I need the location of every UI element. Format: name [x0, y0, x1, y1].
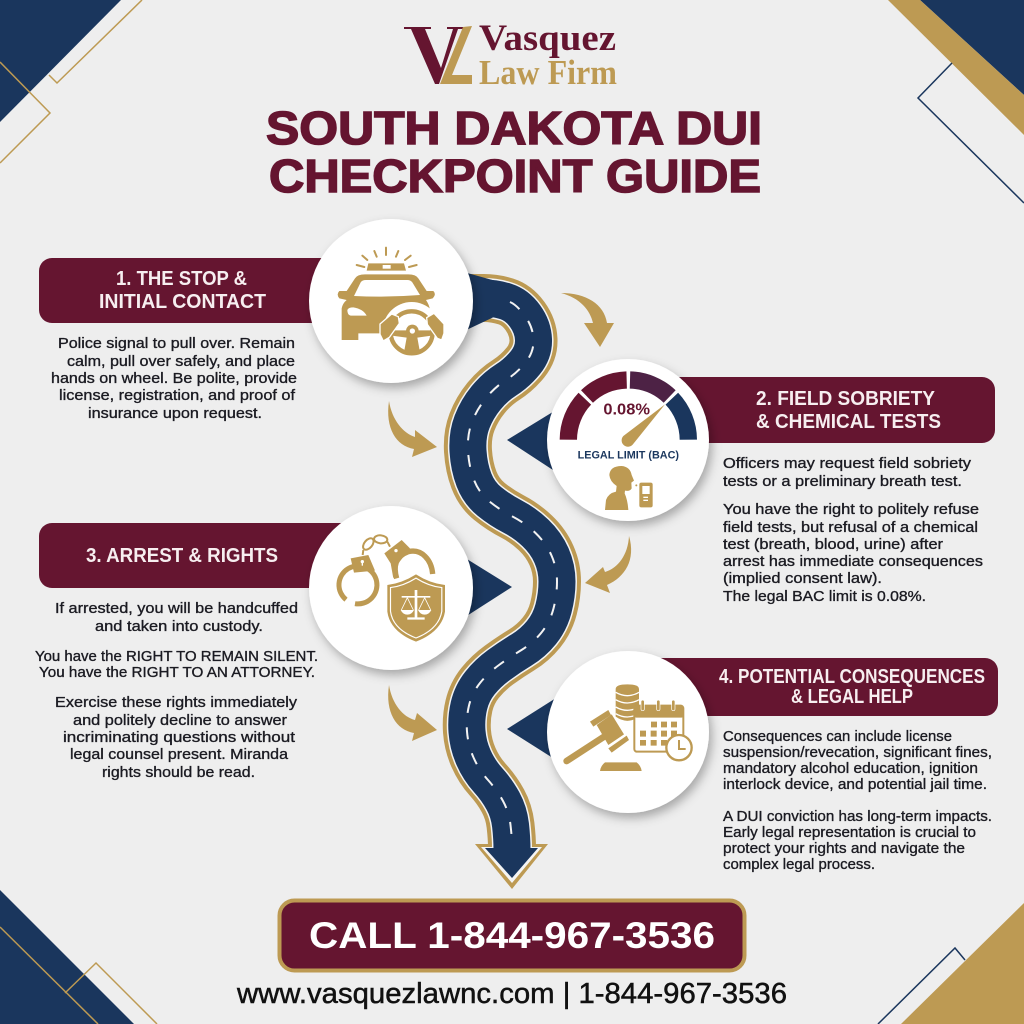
corner decoration: top left [0, 0, 142, 163]
body text 3: Exercise these rights immediately [55, 694, 298, 711]
panel: step 2 field sobriety [507, 359, 995, 605]
pointer triangle 2 [507, 410, 556, 472]
gauge needle [622, 404, 665, 447]
body text 3: legal counsel present. Miranda [70, 746, 289, 763]
pointer triangle 4 [507, 698, 556, 760]
logo: Vasquez Law Firm [404, 18, 617, 92]
banner 1 [39, 258, 359, 323]
road gold edge [467, 298, 557, 848]
banner 3 [39, 523, 359, 588]
title [266, 102, 762, 202]
call to action button [280, 900, 744, 970]
body text 3: and politely decline to answer [73, 712, 287, 729]
body text 2: tests or a preliminary breath test. [723, 473, 962, 490]
body text 3: rights should be read. [102, 764, 255, 781]
circle 1 [309, 219, 473, 383]
title: CHECKPOINT GUIDE [269, 150, 761, 202]
call to action button: CALL 1-844-967-3536 [309, 915, 715, 956]
logo monogram VL [404, 26, 472, 84]
icon: police car and steering wheel [338, 248, 444, 360]
body text 4: Consequences can include license [723, 728, 952, 745]
winding road arrow [460, 271, 557, 889]
road head gold [475, 844, 548, 889]
body text 3: You have the RIGHT TO AN ATTORNEY. [39, 664, 315, 681]
road surface [460, 298, 557, 850]
heading 2 [756, 388, 941, 433]
curved arrow to step 2 [561, 293, 614, 347]
body text 4: interlock device, and potential jail time. [723, 776, 987, 793]
body text 4: mandatory alcohol education, ignition [723, 760, 978, 777]
body text 4: complex legal process. [723, 856, 875, 873]
body text 4: Early legal representation is crucial to [723, 824, 976, 841]
body text 1: license, registration, and proof of [59, 387, 296, 404]
body text 2: You have the right to politely refuse [723, 501, 979, 518]
body text 2: field tests, but refusal of a chemical [723, 519, 978, 536]
body text 4: A DUI conviction has long-term impacts. [723, 808, 992, 825]
road lane dashes [467, 302, 557, 845]
body text 3: If arrested, you will be handcuffed [55, 600, 298, 617]
corner decoration: bottom left [0, 890, 157, 1024]
logo text: Law Firm [479, 53, 617, 92]
website and phone line: www.vasquezlawnc.com | 1-844-967-3536 [236, 978, 787, 1010]
icon: handcuffs and shield with scales [339, 535, 445, 642]
body text 2: (implied consent law). [723, 570, 882, 587]
banner 2 [640, 377, 995, 443]
person breathing into device [605, 466, 653, 510]
road flare from first circle [460, 271, 496, 333]
title: SOUTH DAKOTA DUI [266, 102, 762, 154]
panel: step 1 the stop [39, 219, 473, 422]
body text 1: hands on wheel. Be polite, provide [51, 370, 297, 387]
heading 4 [719, 666, 985, 708]
gauge [568, 380, 688, 440]
gavel [567, 710, 642, 771]
handcuffs [339, 535, 433, 604]
curved arrow to road right [585, 536, 631, 593]
banner 4 [640, 658, 998, 716]
road head [485, 848, 538, 878]
coins [616, 684, 639, 721]
circle 2 [547, 359, 709, 521]
heading 4: 4. POTENTIAL CONSEQUENCES [719, 666, 985, 688]
body text 2: The legal BAC limit is 0.08%. [723, 588, 926, 605]
clock [666, 735, 692, 760]
curved arrow from step 1 [388, 401, 437, 457]
heading 1: 1. THE STOP & [116, 268, 247, 290]
body text 2: arrest has immediate consequences [723, 553, 983, 570]
body text 3: and taken into custody. [95, 618, 263, 635]
heading 2: 2. FIELD SOBRIETY [756, 388, 936, 410]
body text 1: calm, pull over safely, and place [67, 353, 295, 370]
body text 3 [35, 600, 318, 781]
heading 4: & LEGAL HELP [791, 686, 913, 708]
shield [387, 574, 445, 642]
heading 2: & CHEMICAL TESTS [756, 411, 941, 433]
body text 3: You have the RIGHT TO REMAIN SILENT. [35, 648, 318, 665]
icon: gavel, coins and calendar [567, 684, 692, 771]
gauge caption: LEGAL LIMIT (BAC) [578, 450, 679, 462]
body text 3: incriminating questions without [63, 729, 296, 746]
heading 1: INITIAL CONTACT [99, 291, 266, 313]
body text 1: insurance upon request. [88, 405, 262, 422]
curved arrow from step 3 [388, 685, 437, 741]
body text 1 [51, 335, 297, 422]
circle 3 [309, 506, 473, 670]
panel: step 3 arrest and rights [35, 506, 512, 781]
body text 4: suspension/revecation, significant fines, [723, 744, 992, 761]
logo text: Vasquez [479, 18, 616, 59]
corner decoration: top right [888, 0, 1024, 203]
body text 4: protect your rights and navigate the [723, 840, 965, 857]
body text 2: test (breath, blood, urine) after [723, 536, 943, 553]
calendar [634, 700, 683, 752]
pointer triangle 3 [462, 556, 512, 619]
body text 1: Police signal to pull over. Remain [58, 335, 295, 352]
panel: step 4 consequences [507, 651, 998, 873]
road white edge [467, 298, 557, 848]
body text 4 [723, 728, 992, 873]
logo text [479, 18, 617, 92]
circle 4 [547, 651, 709, 813]
body text 2: Officers may request field sobriety [723, 455, 972, 472]
heading 1 [99, 268, 266, 313]
gauge value: 0.08% [603, 402, 650, 419]
body text 2 [723, 455, 983, 605]
heading 3: 3. ARREST & RIGHTS [86, 545, 278, 567]
corner decoration: bottom right [878, 903, 1024, 1024]
icon: BAC gauge and breathalyzer [568, 380, 688, 510]
